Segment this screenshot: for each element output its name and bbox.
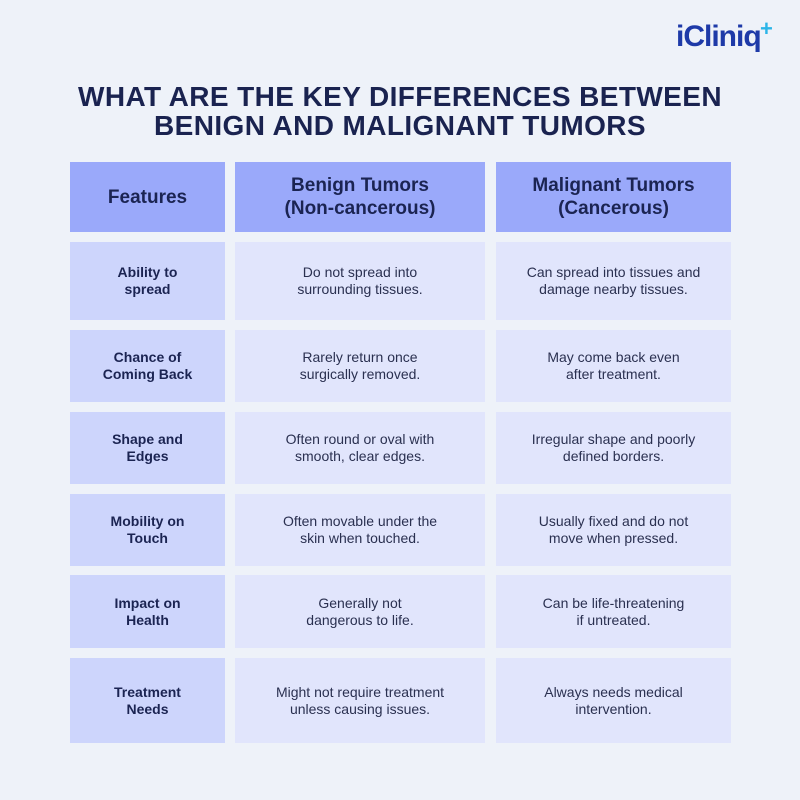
logo: iCliniq <box>676 20 761 53</box>
header: features <box>70 162 225 232</box>
table: surgically removed. <box>300 366 420 382</box>
table: Rarely return once <box>302 349 418 365</box>
title: BENIGN AND MALIGNANT TUMORS <box>154 110 646 141</box>
row: impact: Health <box>126 612 169 628</box>
table: Often movable under the <box>283 513 437 529</box>
row: treatment: Treatment <box>114 684 181 700</box>
row: treatment: Needs <box>126 700 168 716</box>
table: if untreated. <box>577 612 650 628</box>
header: benign: (Non-cancerous) <box>285 198 435 219</box>
header: malignant: Malignant Tumors <box>532 175 695 196</box>
row: chance of coming back: Chance of <box>114 349 181 365</box>
table: Might not require treatment <box>276 684 444 700</box>
table: defined borders. <box>563 448 664 464</box>
table: Irregular shape and poorly <box>532 431 695 447</box>
table: Can be life-threatening <box>543 594 684 610</box>
table: unless causing issues. <box>290 700 430 716</box>
row: treatment <box>70 658 225 743</box>
row: impact: Impact on <box>114 594 181 610</box>
row: mobility <box>70 494 225 566</box>
row: mobility: Touch <box>127 530 168 546</box>
table: Generally not <box>318 594 402 610</box>
table: surrounding tissues. <box>297 281 423 297</box>
row: shape and edges <box>70 412 225 484</box>
header: malignant: (Cancerous) <box>558 198 669 219</box>
table: May come back even <box>547 349 680 365</box>
row: ability to spread: spread <box>125 281 170 297</box>
row: impact <box>70 575 225 648</box>
text: + <box>760 16 772 41</box>
table: Can spread into tissues and <box>527 264 700 280</box>
row: chance of coming back: Coming Back <box>103 366 192 382</box>
table: Do not spread into <box>303 264 417 280</box>
table: Always needs medical <box>544 684 683 700</box>
row: ability to spread: Ability to <box>118 264 177 280</box>
header: malignant <box>496 162 731 232</box>
row: chance of coming back <box>70 330 225 402</box>
table: skin when touched. <box>300 530 420 546</box>
title: WHAT ARE THE KEY DIFFERENCES BETWEEN <box>78 81 722 112</box>
title <box>78 81 722 141</box>
header: features: Features <box>108 186 187 208</box>
table: move when pressed. <box>549 530 678 546</box>
table: Often round or oval with <box>286 431 434 447</box>
table: intervention. <box>575 700 652 716</box>
table: Usually fixed and do not <box>539 513 688 529</box>
table: damage nearby tissues. <box>539 281 688 297</box>
table: after treatment. <box>566 366 661 382</box>
row: shape and edges: Shape and <box>112 431 183 447</box>
header: benign: Benign Tumors <box>291 175 429 196</box>
table: smooth, clear edges. <box>295 448 425 464</box>
header: benign <box>235 162 485 232</box>
row: shape and edges: Edges <box>126 448 168 464</box>
row: mobility: Mobility on <box>111 513 184 529</box>
table: dangerous to life. <box>306 612 414 628</box>
row: ability to spread <box>70 242 225 320</box>
